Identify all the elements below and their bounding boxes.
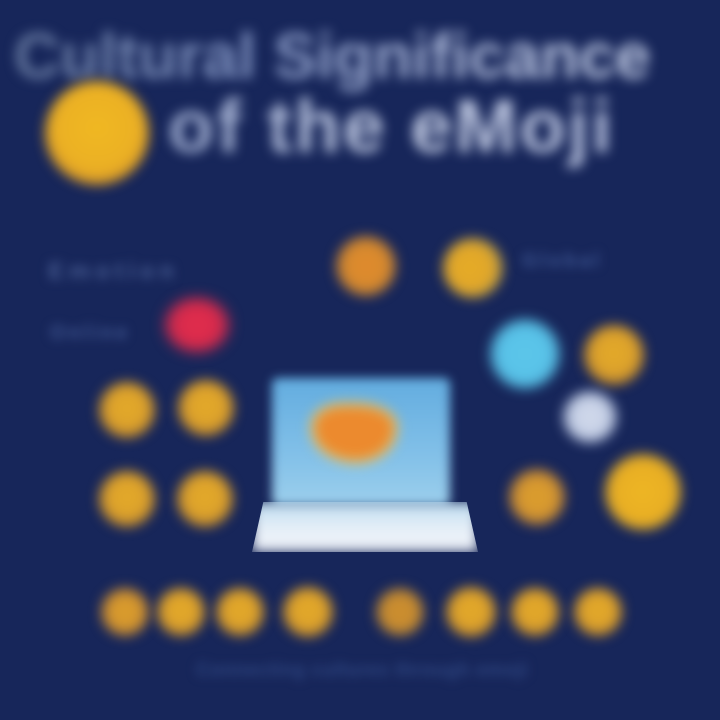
icon: bottom emoji 2 (157, 588, 205, 636)
icon: large emoji by title (45, 81, 149, 185)
text block: upper left label: Emotion (48, 258, 179, 285)
title line one: Cultural Significance (14, 20, 651, 92)
emoji group: left grid (90, 371, 243, 536)
laptop base (252, 502, 478, 552)
icon: yellow emoji top (443, 238, 503, 298)
caption line: Connecting cultures through emoji (196, 660, 528, 681)
icon: large emoji right (605, 454, 681, 530)
emoji row: bottom (92, 578, 630, 646)
icon: bottom emoji 5 (376, 588, 424, 636)
icon: laptop (252, 370, 478, 552)
text block: left label: Online (50, 322, 130, 344)
orange slice on screen (310, 402, 398, 464)
text block: upper right label: Global (522, 250, 602, 272)
title line two: of the eMoji (168, 84, 615, 168)
icon: emoji row 2 left (99, 471, 155, 527)
icon: bottom emoji 7 (511, 588, 559, 636)
icon: bottom emoji 6 (446, 587, 496, 637)
icon: bottom emoji 3 (216, 588, 264, 636)
icon: cyan circle (490, 319, 560, 389)
icon: bottom emoji 8 (574, 588, 622, 636)
laptop screen (272, 378, 450, 506)
icon: white bubble (563, 391, 617, 443)
icon: red heart (165, 298, 229, 352)
icon: yellow emoji right (584, 325, 644, 385)
icon: bottom emoji 4 (283, 587, 333, 637)
icon: orange emoji (336, 236, 396, 296)
icon: bottom emoji 1 (101, 588, 149, 636)
icon: emoji row 2 right (177, 471, 233, 527)
icon: emoji right of laptop (509, 469, 565, 525)
icon: emoji row 1 right (178, 380, 234, 436)
icon: emoji row 1 left (99, 382, 155, 438)
